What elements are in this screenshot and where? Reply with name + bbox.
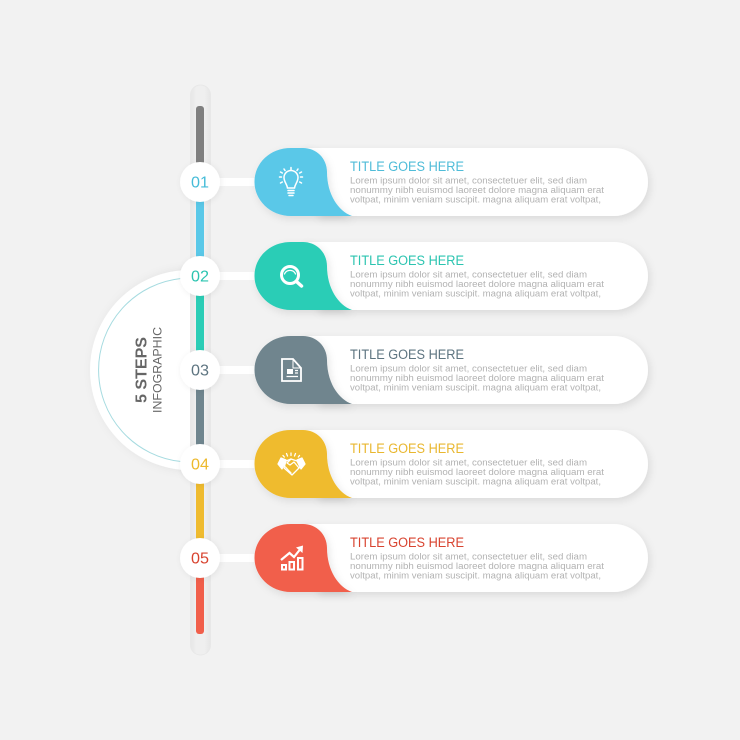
body text: nonummy nibh euismod laoreet dolore magna aliquam erat — [350, 373, 604, 384]
title: TITLE GOES HERE — [350, 535, 464, 550]
panel: centre semicircle — [90, 270, 190, 470]
step 03 — [180, 336, 648, 404]
body text: voltpat, minim veniam suscipit. magna aliquam erat voltpat, — [350, 570, 601, 582]
step 04 — [180, 430, 648, 498]
icon: growth chart — [281, 546, 303, 570]
body text: Lorem ipsum dolor sit amet, consectetuer elit, sed diam — [350, 270, 587, 280]
body text: Lorem ipsum dolor sit amet, consectetuer elit, sed diam — [350, 458, 587, 468]
step 05: 05 — [191, 550, 209, 568]
colour tab — [254, 336, 352, 404]
step 01 — [180, 148, 648, 216]
body text: nonummy nibh euismod laoreet dolore magna aliquam erat — [350, 185, 604, 196]
heading: 5 steps: 5 STEPS — [134, 337, 150, 403]
body text: nonummy nibh euismod laoreet dolore magna aliquam erat — [350, 279, 604, 290]
icon: light bulb — [280, 168, 302, 196]
colour tab — [254, 148, 352, 216]
card — [303, 336, 648, 404]
number — [180, 350, 220, 390]
body text: voltpat, minim veniam suscipit. magna aliquam erat voltpat, — [350, 476, 601, 488]
step 01: 01 — [191, 174, 209, 192]
title: TITLE GOES HERE — [350, 253, 464, 268]
step 05 — [180, 524, 648, 592]
number — [180, 538, 220, 578]
card — [303, 430, 648, 498]
number — [180, 444, 220, 484]
body text: voltpat, minim veniam suscipit. magna aliquam erat voltpat, — [350, 194, 601, 206]
vertical timeline track — [190, 85, 210, 655]
body text — [350, 270, 604, 300]
body text — [350, 364, 604, 394]
icon: magnifier — [282, 266, 302, 286]
number — [180, 162, 220, 202]
connector — [215, 178, 260, 186]
body text: Lorem ipsum dolor sit amet, consectetuer elit, sed diam — [350, 364, 587, 374]
card — [303, 242, 648, 310]
icon: handshake — [278, 453, 305, 475]
colour tab — [254, 524, 352, 592]
body text: Lorem ipsum dolor sit amet, consectetuer elit, sed diam — [350, 176, 587, 186]
title: TITLE GOES HERE — [350, 347, 464, 362]
colour tab — [254, 242, 352, 310]
body text — [350, 458, 604, 488]
card — [303, 148, 648, 216]
connector — [215, 366, 260, 374]
number — [180, 256, 220, 296]
step 02: 02 — [191, 268, 209, 286]
step 04: 04 — [191, 456, 209, 474]
title: TITLE GOES HERE — [350, 441, 464, 456]
connector — [215, 460, 260, 468]
body text — [350, 176, 604, 206]
title: TITLE GOES HERE — [350, 159, 464, 174]
body text: nonummy nibh euismod laoreet dolore magna aliquam erat — [350, 561, 604, 572]
connector — [215, 554, 260, 562]
step 02 — [180, 242, 648, 310]
body text: voltpat, minim veniam suscipit. magna aliquam erat voltpat, — [350, 288, 601, 300]
heading: infographic: INFOGRAPHIC — [150, 327, 164, 413]
body text: nonummy nibh euismod laoreet dolore magna aliquam erat — [350, 467, 604, 478]
icon: document — [282, 359, 301, 381]
body text — [350, 552, 604, 582]
body text: voltpat, minim veniam suscipit. magna aliquam erat voltpat, — [350, 382, 601, 394]
body text: Lorem ipsum dolor sit amet, consectetuer elit, sed diam — [350, 552, 587, 562]
connector — [215, 272, 260, 280]
colour tab — [254, 430, 352, 498]
card — [303, 524, 648, 592]
step 03: 03 — [191, 362, 209, 380]
